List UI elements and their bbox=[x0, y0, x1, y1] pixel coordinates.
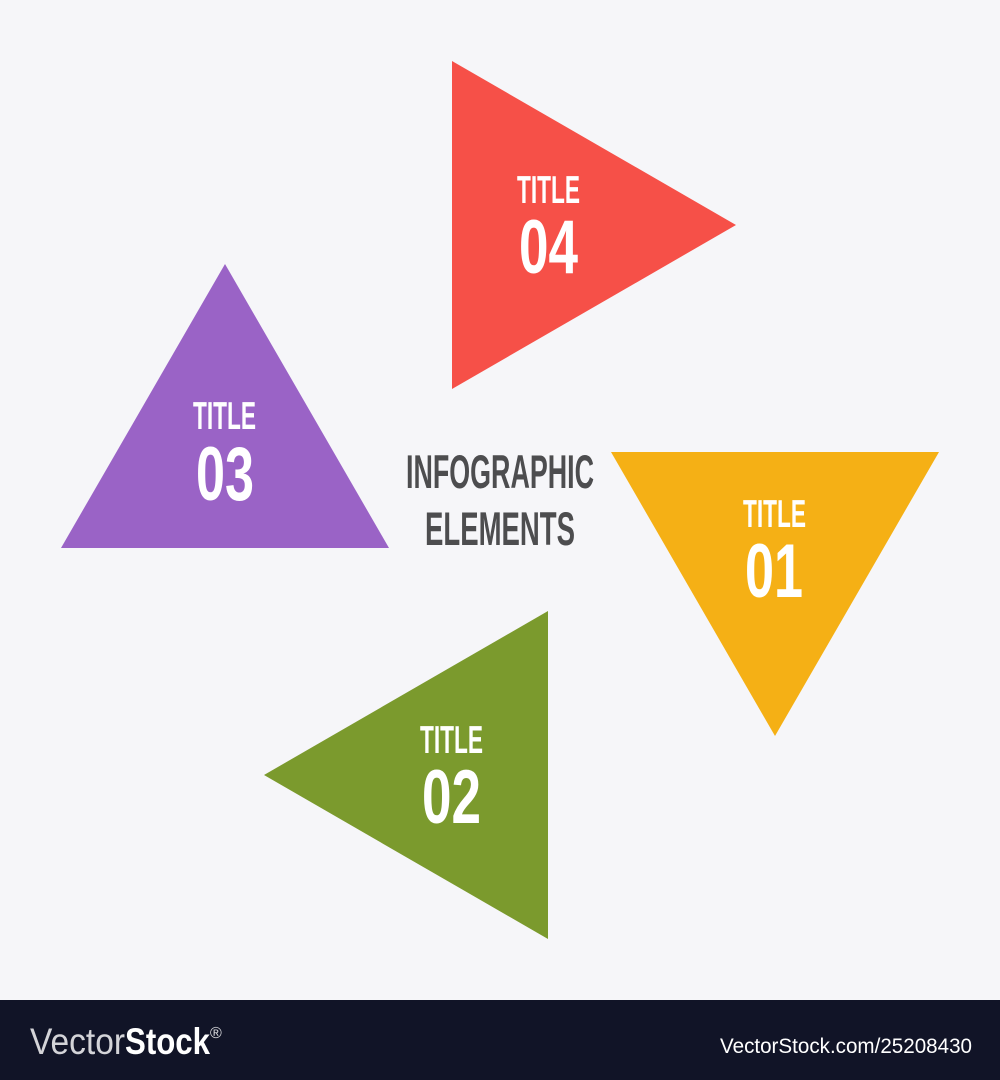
center heading: INFOGRAPHIC bbox=[406, 445, 594, 498]
triangle 02: green bbox=[264, 611, 548, 939]
footer image id: VectorStock.com/25208430 bbox=[720, 1035, 972, 1058]
label: title 02: TITLE bbox=[420, 719, 483, 762]
footer logo bbox=[30, 1021, 222, 1062]
footer band bbox=[0, 1000, 1000, 1080]
number: 01: 01 bbox=[745, 529, 803, 614]
footer logo: ® bbox=[210, 1025, 222, 1042]
number: 03: 03 bbox=[196, 432, 254, 517]
triangle 03: purple bbox=[61, 264, 389, 548]
number: 04: 04 bbox=[519, 205, 578, 290]
label: title 03: TITLE bbox=[193, 395, 256, 438]
triangle 01: amber bbox=[611, 452, 939, 736]
label: title 01: TITLE bbox=[743, 493, 806, 536]
label: title 04: TITLE bbox=[517, 169, 580, 212]
center heading bbox=[406, 445, 594, 555]
number: 02: 02 bbox=[422, 755, 481, 840]
footer logo: Vector bbox=[30, 1021, 125, 1062]
triangle 04: red bbox=[452, 61, 736, 389]
footer logo: Stock bbox=[125, 1021, 210, 1062]
center heading: ELEMENTS bbox=[425, 502, 575, 555]
